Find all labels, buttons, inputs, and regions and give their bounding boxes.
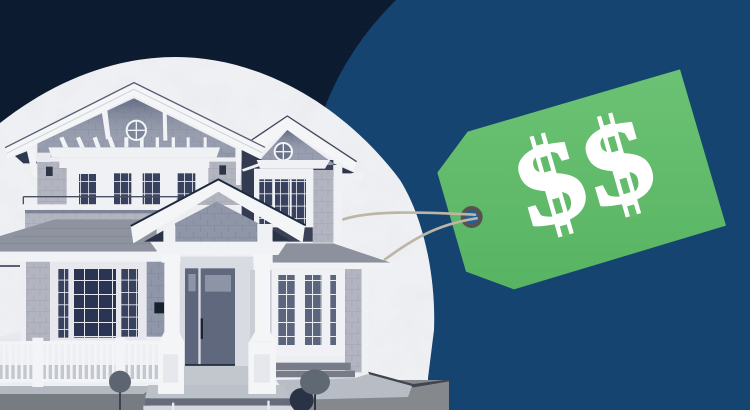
balcony rail and ledge [18, 197, 178, 209]
upper windows [79, 173, 195, 204]
path lights [172, 401, 270, 410]
dollar sign left: $ [502, 113, 600, 253]
right column [248, 254, 276, 394]
main gable fascia [5, 83, 265, 163]
porch railing [0, 332, 158, 387]
house [0, 83, 449, 410]
left lower roof [0, 219, 157, 252]
right lower roof [270, 243, 391, 263]
paper texture [0, 57, 434, 410]
porch gable [131, 179, 305, 243]
price tag [343, 69, 726, 289]
white paper circle [0, 57, 434, 410]
dollar sign right: $ [569, 93, 668, 233]
pergola beam and piers [48, 147, 220, 205]
right wing gable [242, 116, 364, 245]
background: navy blue shape [300, 0, 750, 410]
front door [180, 257, 253, 366]
french doors [250, 270, 345, 363]
shrubs [109, 369, 330, 410]
lower wall [0, 262, 165, 342]
upper storey wall [25, 162, 244, 228]
porch floor and walkway [143, 366, 412, 410]
eyelet [461, 206, 483, 228]
wall lamps [46, 165, 359, 288]
string [343, 213, 477, 259]
steps [273, 363, 355, 377]
tag body [437, 69, 726, 289]
gable brackets and rafters [27, 110, 242, 185]
right wall siding and post [345, 269, 368, 372]
bay window [58, 269, 138, 338]
left column [158, 254, 184, 394]
ground [0, 372, 449, 410]
main gable siding [37, 98, 235, 162]
lower roof fascia [0, 252, 394, 269]
porch beam [150, 242, 287, 255]
round attic window [126, 120, 147, 141]
